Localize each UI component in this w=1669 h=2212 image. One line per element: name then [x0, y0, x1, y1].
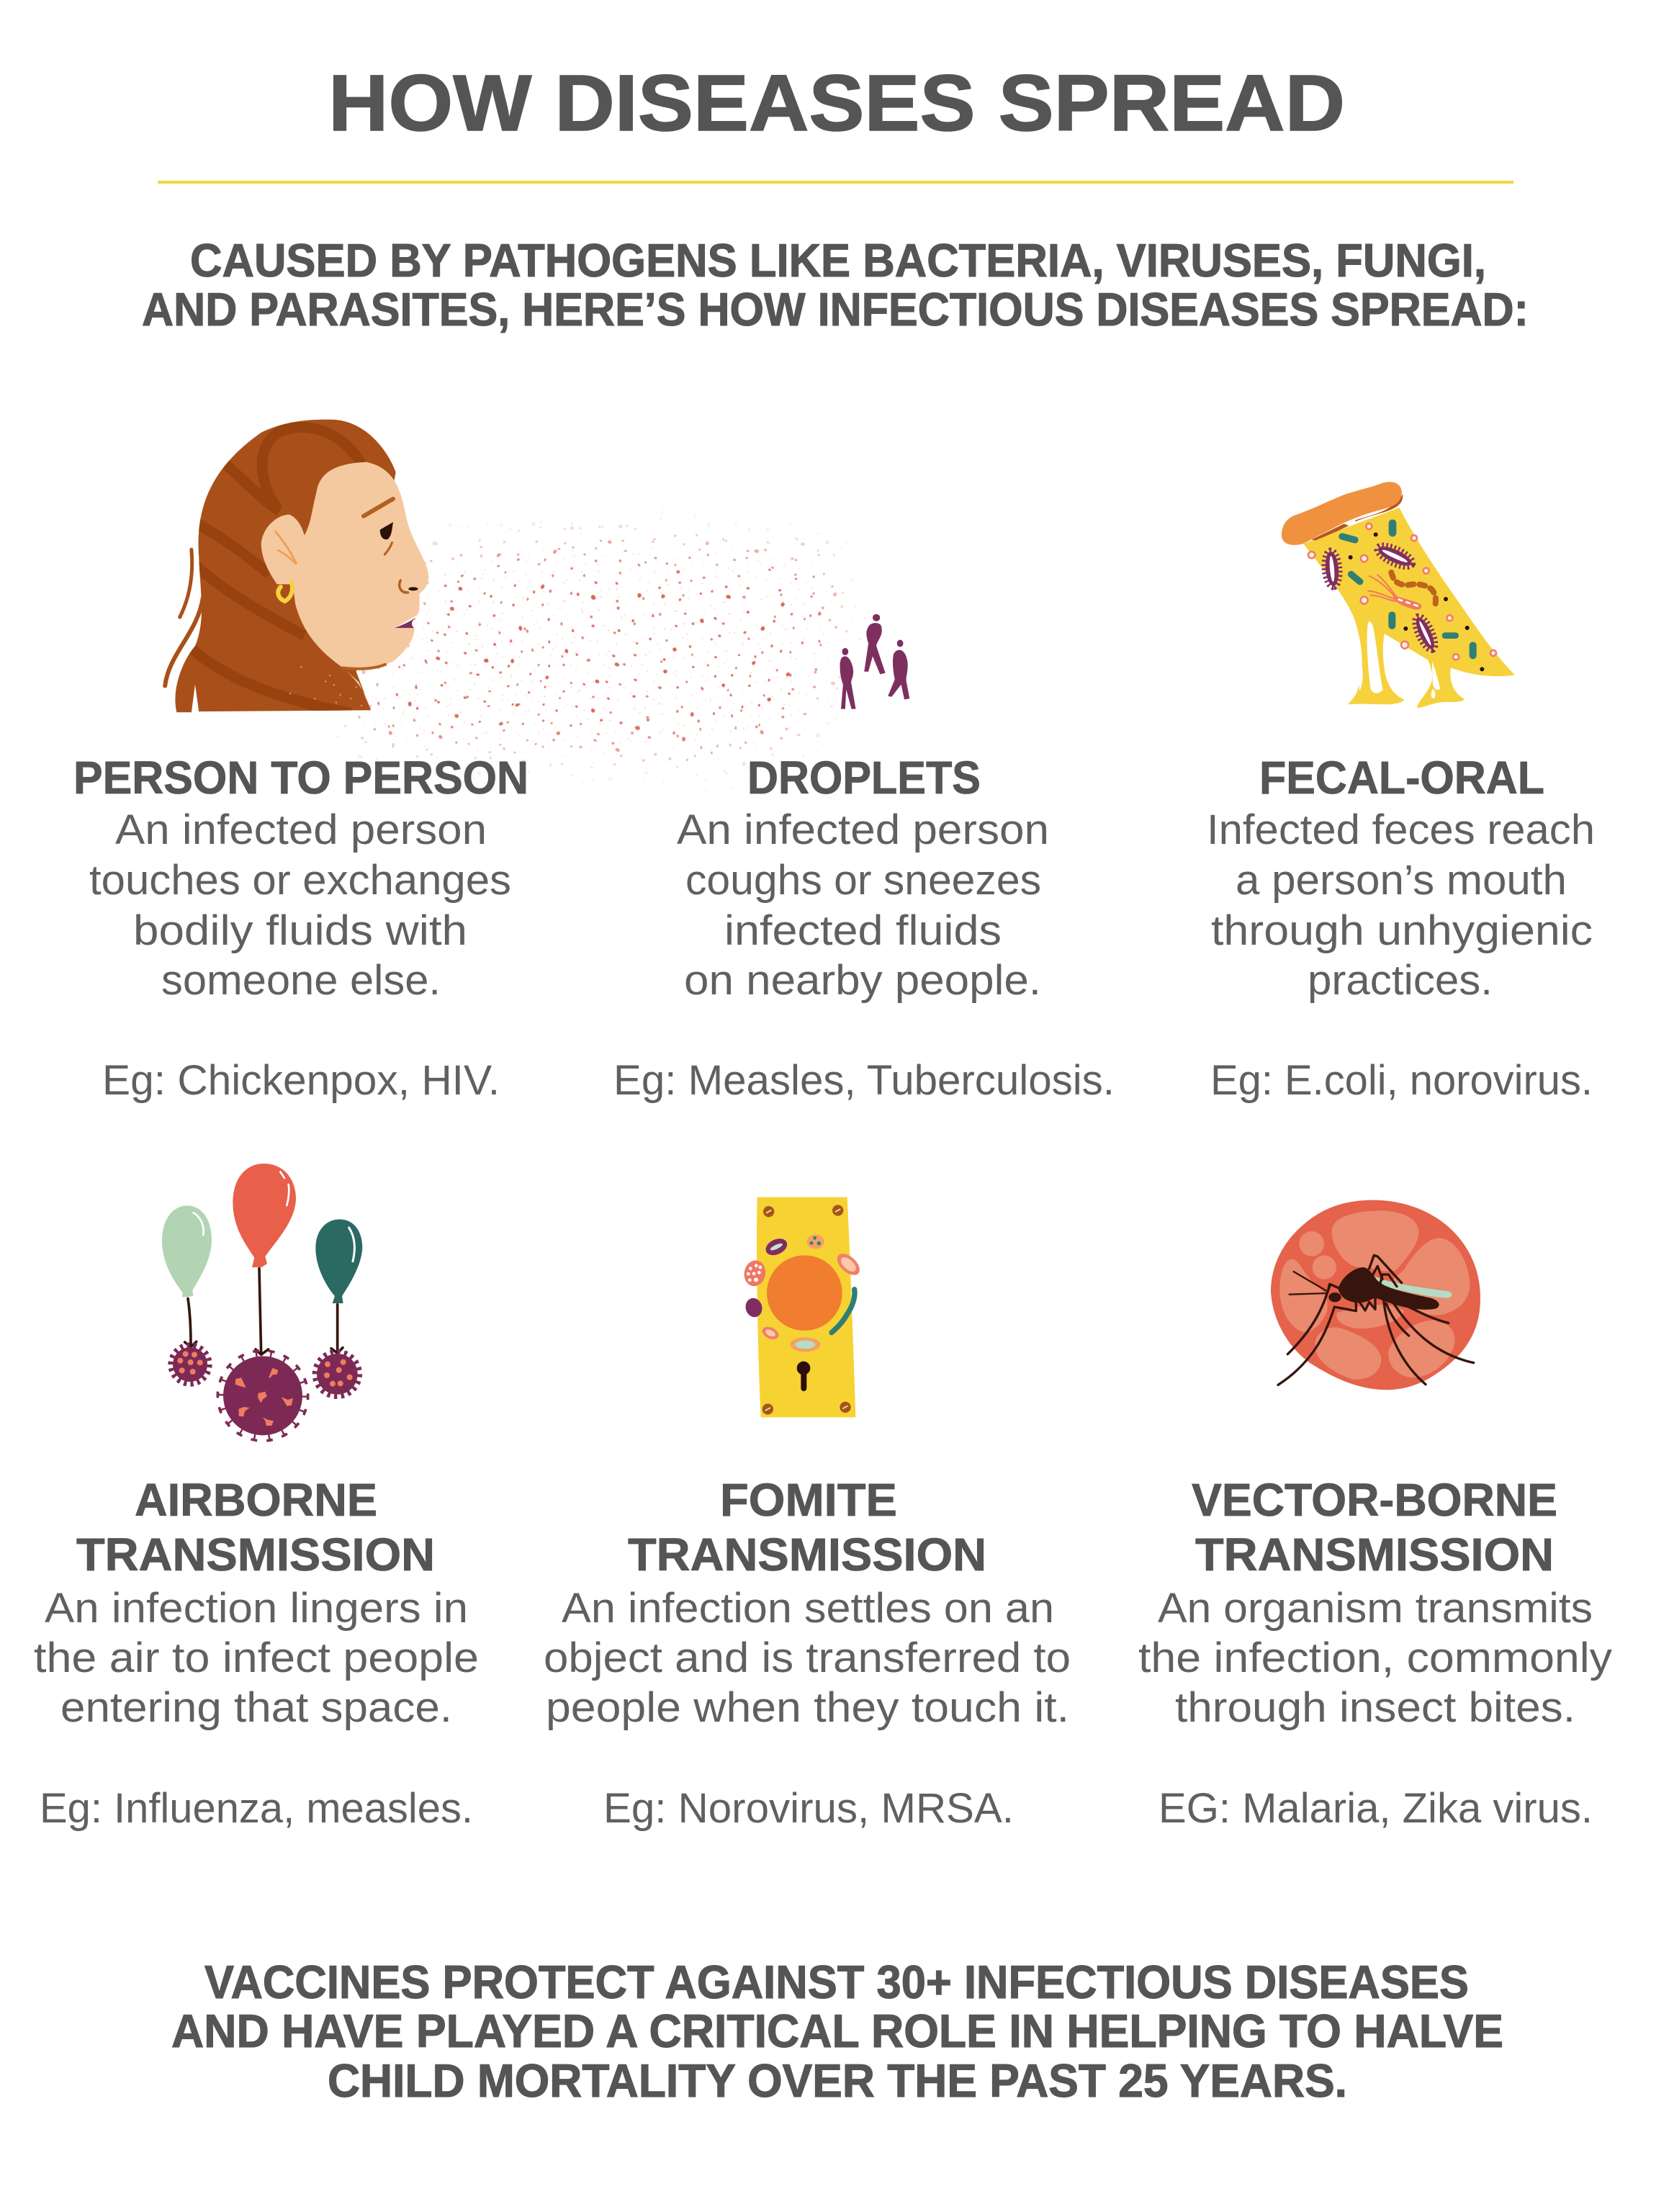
description: droplets: coughs or sneezes	[685, 857, 1041, 904]
keyhole	[797, 1362, 810, 1391]
description: fomite transmission	[544, 1585, 1071, 1731]
example: droplets: Eg: Measles, Tuberculosis.	[613, 1057, 1115, 1104]
flagellated bacterium	[1368, 575, 1421, 610]
lips	[395, 615, 418, 628]
icon: three people	[840, 614, 909, 709]
description: fecal-oral	[1207, 806, 1595, 1004]
description: fomite transmission: An infection settles on an	[562, 1585, 1054, 1632]
heading: vector-borne transmission: VECTOR-BORNE	[1192, 1474, 1557, 1526]
door knob	[767, 1255, 842, 1331]
eyebrow	[364, 499, 393, 516]
description: droplets	[677, 806, 1049, 1004]
red balloon	[233, 1164, 296, 1267]
mosquito body	[1338, 1267, 1439, 1310]
earring	[278, 583, 292, 601]
microbes on plate	[742, 1234, 863, 1352]
description: airborne transmission	[34, 1585, 479, 1731]
green balloon	[162, 1205, 212, 1298]
description: fecal-oral: practices.	[1308, 957, 1493, 1004]
description: droplets: on nearby people.	[684, 957, 1041, 1004]
spray dots on hair	[290, 667, 361, 706]
description: person to person: someone else.	[161, 957, 441, 1004]
example: airborne transmission: Eg: Influenza, measles.	[40, 1785, 473, 1832]
green rods	[1338, 519, 1477, 659]
ear detail	[275, 531, 297, 565]
mosquito legs	[1278, 1255, 1474, 1385]
small virus left	[171, 1346, 209, 1383]
face	[261, 462, 428, 710]
heading: fecal-oral: FECAL-ORAL	[1259, 752, 1544, 804]
description: vector-borne transmission	[1138, 1585, 1612, 1731]
closing statement: VACCINES PROTECT AGAINST 30+ INFECTIOUS DISEASES	[204, 1956, 1469, 2008]
heading: airborne transmission	[76, 1474, 435, 1581]
heading: vector-borne transmission	[1192, 1474, 1557, 1581]
description: fomite transmission: object and is transferred to	[544, 1635, 1071, 1681]
description: fomite transmission: people when they touch it.	[546, 1684, 1069, 1731]
teal balloon	[315, 1219, 362, 1303]
cheese	[1303, 508, 1515, 708]
icon: pizza slice with pathogens	[1282, 482, 1515, 708]
heading: fomite transmission	[628, 1474, 986, 1581]
example: person to person: Eg: Chickenpox, HIV.	[102, 1057, 500, 1104]
icon: door plate with microbes	[742, 1197, 863, 1417]
description: airborne transmission: the air to infect people	[34, 1635, 479, 1681]
crust shadow	[1312, 494, 1403, 541]
closing statement: AND HAVE PLAYED A CRITICAL ROLE IN HELPING TO HALVE	[171, 2005, 1503, 2057]
large virus centre	[217, 1351, 308, 1441]
black specks	[1349, 532, 1484, 671]
description: person to person: An infected person	[115, 806, 487, 853]
loose hair strands	[165, 549, 203, 685]
heading: fomite transmission: FOMITE	[720, 1474, 897, 1526]
hair	[175, 420, 396, 712]
example: vector-borne transmission: EG: Malaria, Zika virus.	[1159, 1785, 1593, 1832]
description: droplets: infected fluids	[724, 907, 1002, 954]
example: fecal-oral: Eg: E.coli, norovirus.	[1210, 1057, 1593, 1104]
intro heading	[142, 234, 1529, 336]
description: airborne transmission: An infection lingers in	[45, 1585, 468, 1632]
icon: head in profile	[165, 420, 428, 714]
heading: airborne transmission: TRANSMISSION	[76, 1529, 435, 1581]
description: fecal-oral: a person’s mouth	[1236, 857, 1567, 904]
closing statement: CHILD MORTALITY OVER THE PAST 25 YEARS.	[328, 2054, 1347, 2107]
icon: balloons lifting viruses	[162, 1164, 362, 1441]
description: person to person: bodily fluids with	[133, 907, 467, 954]
jaw line	[343, 665, 385, 669]
description: person to person	[89, 806, 511, 1004]
title underline	[158, 181, 1513, 184]
eye	[380, 522, 393, 539]
brown chain bacterium	[1391, 572, 1436, 607]
intro heading: CAUSED BY PATHOGENS LIKE BACTERIA, VIRUSES, FUNGI,	[190, 234, 1486, 287]
cheek line	[384, 543, 392, 554]
spiky bacteria	[1323, 541, 1439, 652]
icon: mosquito on red cell	[1271, 1200, 1480, 1390]
mosquito wing	[1372, 1276, 1452, 1298]
small virus right	[315, 1352, 359, 1395]
title: HOW DISEASES SPREAD	[328, 59, 1345, 148]
cell lobes	[1279, 1210, 1470, 1380]
crust	[1282, 482, 1402, 545]
description: person to person: touches or exchanges	[89, 857, 511, 904]
description: fecal-oral: Infected feces reach	[1207, 806, 1595, 853]
panel: airborne transmission	[34, 1164, 479, 1832]
strings	[185, 1269, 343, 1354]
nose	[400, 580, 408, 593]
example: fomite transmission: Eg: Norovirus, MRSA.	[603, 1785, 1014, 1832]
droplet spray	[336, 510, 867, 783]
panel: person to person	[73, 420, 528, 1104]
description: airborne transmission: entering that space.	[60, 1684, 452, 1731]
heading: droplets: DROPLETS	[747, 752, 981, 804]
heading: vector-borne transmission: TRANSMISSION	[1195, 1529, 1554, 1581]
pepperoni rings	[1308, 523, 1496, 660]
panel: vector-borne transmission	[1138, 1200, 1612, 1832]
hair stripes	[187, 427, 361, 714]
panel: fecal-oral	[1207, 482, 1595, 1104]
description: fecal-oral: through unhygienic	[1211, 907, 1593, 954]
intro heading: AND PARASITES, HERE’S HOW INFECTIOUS DISEASES SPREAD:	[142, 283, 1529, 336]
panel: fomite transmission	[544, 1197, 1071, 1832]
description: vector-borne transmission: through insect bites.	[1175, 1684, 1575, 1731]
heading: person to person: PERSON TO PERSON	[73, 752, 528, 804]
yellow plate	[757, 1197, 855, 1417]
cheese gap	[1367, 621, 1383, 693]
heading: airborne transmission: AIRBORNE	[135, 1474, 377, 1526]
description: vector-borne transmission: the infection, commonly	[1138, 1635, 1612, 1681]
red cell	[1271, 1200, 1480, 1390]
description: droplets: An infected person	[677, 806, 1049, 853]
closing statement	[171, 1956, 1503, 2107]
heading: fomite transmission: TRANSMISSION	[628, 1529, 986, 1581]
panel: droplets	[288, 475, 1115, 1104]
description: vector-borne transmission: An organism transmits	[1158, 1585, 1593, 1632]
screws	[762, 1205, 851, 1415]
